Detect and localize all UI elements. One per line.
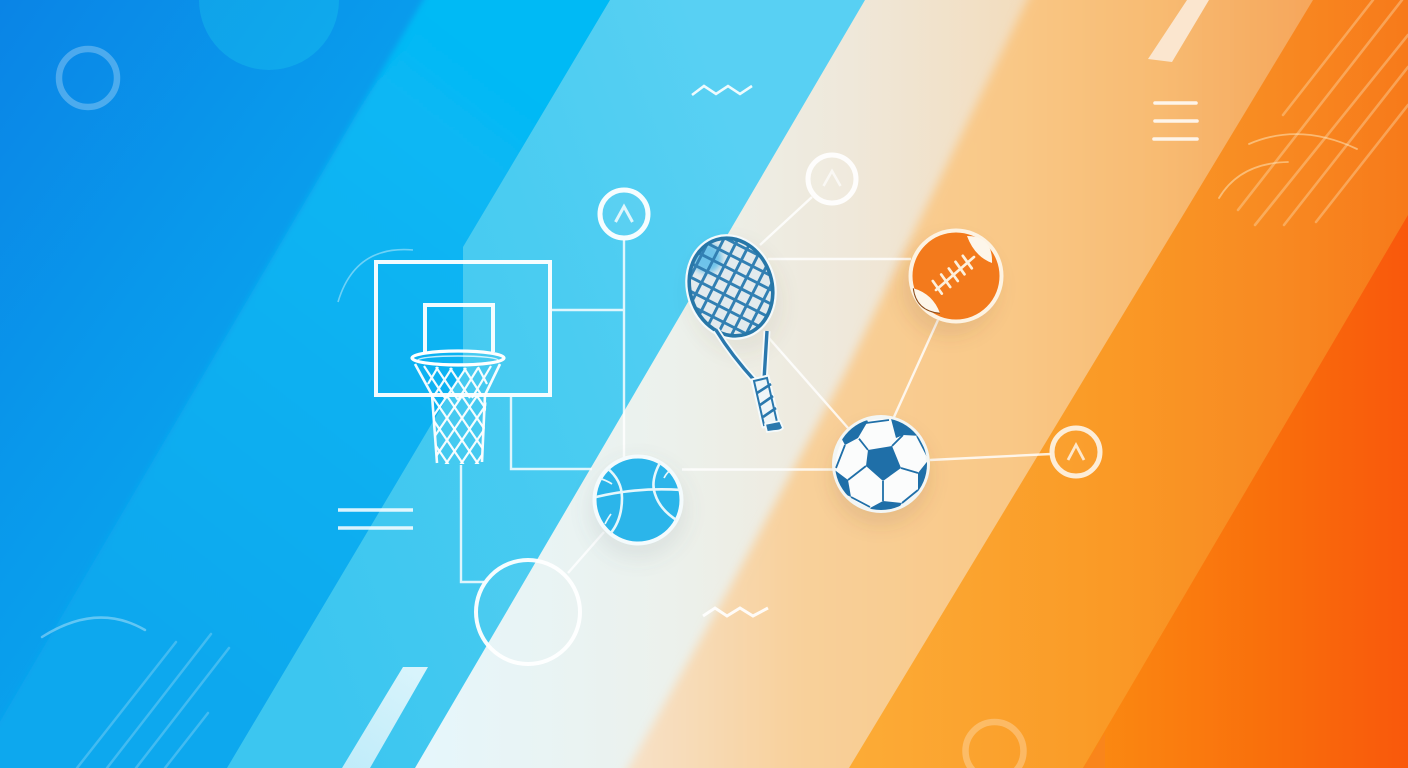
decorative large circle top xyxy=(199,0,339,70)
icon: basketball xyxy=(588,456,688,560)
node ring far right xyxy=(1052,428,1100,476)
connector lines xyxy=(461,197,1051,582)
decorative triple lines right xyxy=(1154,103,1197,139)
decorative zigzag top xyxy=(692,86,752,95)
icon: soccer ball xyxy=(831,415,931,526)
rim xyxy=(412,351,504,365)
football laces xyxy=(933,256,974,294)
decorative double lines left xyxy=(338,510,413,528)
backboard inner square xyxy=(425,305,493,352)
decorative zigzag bottom xyxy=(703,608,768,616)
node ring top centre xyxy=(600,190,648,238)
decorative hatch and arc bottom left xyxy=(42,618,229,768)
soccer ball seams xyxy=(836,420,930,507)
racket throat xyxy=(716,330,767,381)
decorative ring bottom xyxy=(966,722,1024,768)
net xyxy=(414,363,502,464)
racket handle xyxy=(752,376,783,432)
decorative bar top right xyxy=(1148,0,1209,62)
decorative hatch and arcs top right xyxy=(1219,0,1408,225)
empty node circle xyxy=(476,560,580,664)
node ring upper right xyxy=(808,155,856,203)
icon: american football xyxy=(902,230,1002,336)
backboard xyxy=(376,262,550,395)
decorative ring top left xyxy=(59,49,117,107)
icon: tennis racket xyxy=(685,234,784,433)
icon: basketball hoop xyxy=(376,262,550,477)
racket head xyxy=(675,225,787,349)
decorative bar bottom left xyxy=(342,667,428,768)
football tips xyxy=(967,236,992,263)
soccer ball dark patches xyxy=(836,419,927,510)
decorative arc near backboard xyxy=(338,250,413,302)
